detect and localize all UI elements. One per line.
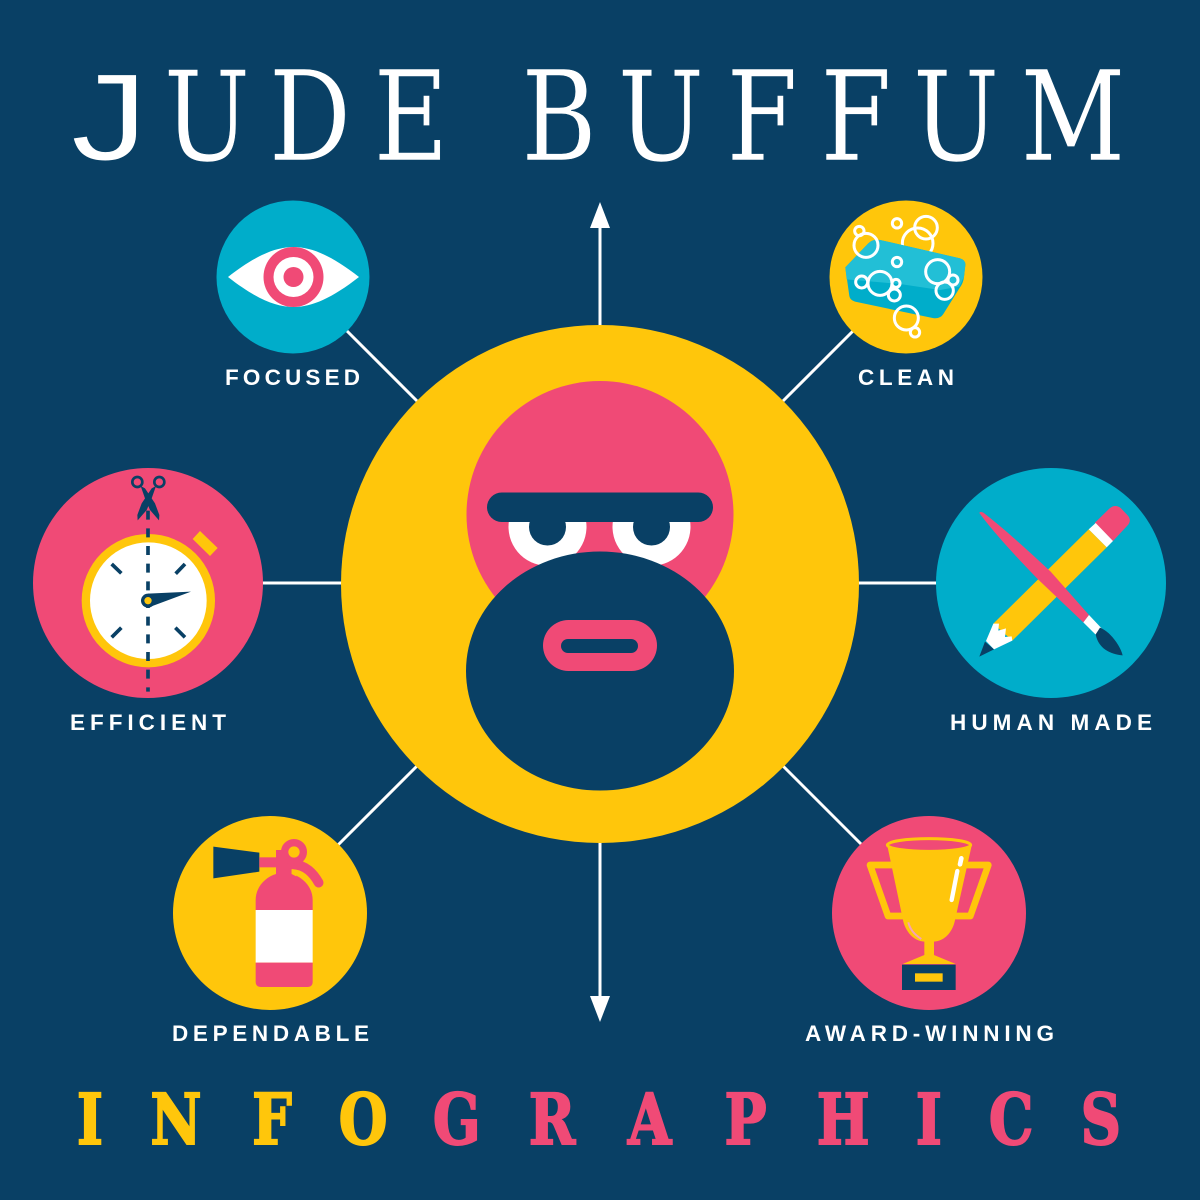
- panel: award-winning icon: [832, 816, 1026, 1010]
- panel: efficient icon: [33, 468, 263, 698]
- title: J: [59, 52, 156, 200]
- title: UDE BUFFUM: [164, 44, 1125, 190]
- arrow: down: [590, 996, 610, 1022]
- label: human made: HUMAN MADE: [950, 710, 1152, 735]
- label: efficient: EFFICIENT: [70, 710, 226, 735]
- panel: dependable icon: [173, 816, 367, 1010]
- panel: clean icon: [830, 200, 982, 354]
- panel: human made icon: [936, 468, 1166, 698]
- label: focused: FOCUSED: [225, 365, 360, 390]
- label: clean: CLEAN: [858, 365, 954, 390]
- panel: focused icon: [216, 200, 370, 354]
- footer heading: INFO GRAPHICS: [77, 1078, 1121, 1161]
- label: award-winning: AWARD-WINNING: [805, 1021, 1054, 1046]
- label: dependable: DEPENDABLE: [172, 1021, 369, 1046]
- arrow: up: [590, 202, 610, 228]
- central portrait: [341, 325, 859, 843]
- connector lines: [262, 222, 938, 1000]
